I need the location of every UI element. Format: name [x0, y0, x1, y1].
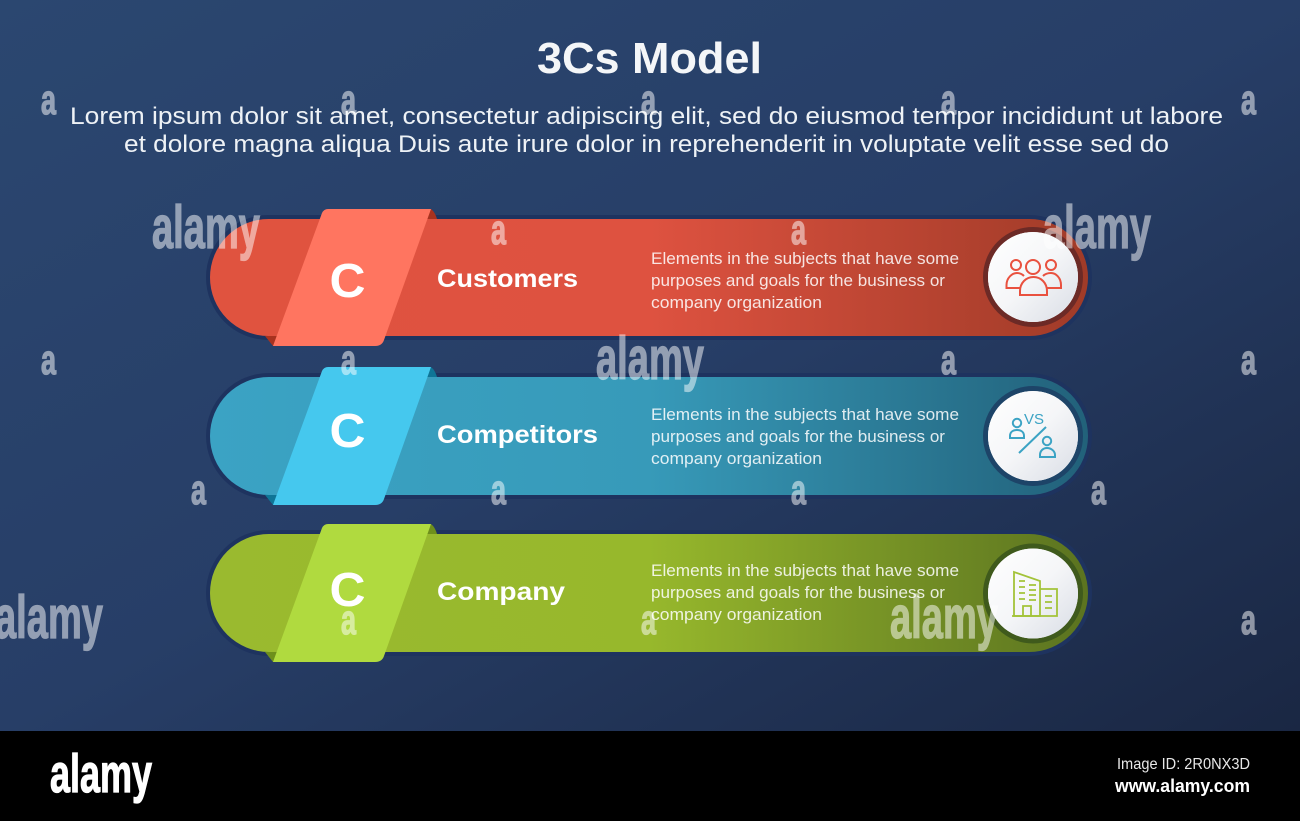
watermarks: alamy — [890, 584, 998, 651]
description — [651, 249, 959, 312]
fold shadows — [265, 524, 437, 662]
watermarks — [0, 76, 1256, 651]
panel: competitors — [206, 367, 1092, 505]
description: purposes and goals for the business or — [651, 427, 945, 446]
label: Competitors — [437, 421, 598, 449]
footer bar — [0, 731, 1300, 821]
website: www.alamy.com — [1114, 776, 1250, 796]
watermarks: a — [1241, 336, 1256, 383]
watermarks: a — [1241, 76, 1256, 123]
intro text — [70, 103, 1223, 158]
label: Company — [437, 578, 565, 606]
watermarks: a — [941, 76, 956, 123]
watermarks: a — [491, 466, 506, 513]
fold shadows — [265, 367, 437, 505]
watermarks: alamy — [596, 325, 704, 392]
icon: person versus person: VS — [1024, 411, 1044, 428]
watermarks: a — [491, 206, 506, 253]
watermarks: alamy — [152, 194, 260, 261]
tab: competitors — [273, 367, 431, 505]
watermarks: a — [1091, 466, 1106, 513]
icon: office building — [986, 546, 1080, 641]
description: purposes and goals for the business or — [651, 583, 945, 602]
watermarks: alamy — [1043, 194, 1151, 261]
tab: customers — [273, 209, 431, 346]
description: Elements in the subjects that have some — [651, 561, 959, 580]
description — [651, 405, 959, 468]
intro text: Lorem ipsum dolor sit amet, consectetur adipiscing elit, sed do eiusmod tempor incididunt ut labore — [70, 103, 1223, 130]
watermarks: a — [341, 336, 356, 383]
description: Elements in the subjects that have some — [651, 249, 959, 268]
icon: person versus person — [986, 388, 1080, 484]
watermarks: a — [941, 336, 956, 383]
watermarks: a — [341, 76, 356, 123]
watermarks: alamy — [0, 584, 103, 651]
description: purposes and goals for the business or — [651, 271, 945, 290]
description — [651, 561, 959, 624]
watermarks: a — [791, 466, 806, 513]
panel: company — [206, 524, 1092, 662]
letter C: C — [330, 564, 366, 617]
fold shadows — [265, 209, 437, 346]
watermarks: a — [1241, 596, 1256, 643]
description: company organization — [651, 449, 822, 468]
bar: competitors — [206, 373, 1092, 499]
watermarks: a — [641, 596, 656, 643]
title: 3Cs Model — [537, 34, 762, 83]
footer logo: alamy — [50, 744, 152, 804]
watermarks: a — [341, 596, 356, 643]
description: company organization — [651, 605, 822, 624]
description: Elements in the subjects that have some — [651, 405, 959, 424]
bar: company — [206, 530, 1092, 656]
watermarks: a — [41, 336, 56, 383]
watermarks: a — [191, 466, 206, 513]
bar: customers — [206, 215, 1092, 340]
label: Customers — [437, 265, 578, 293]
watermarks: a — [641, 76, 656, 123]
watermarks: a — [41, 76, 56, 123]
tab: company — [273, 524, 431, 662]
intro text: et dolore magna aliqua Duis aute irure dolor in reprehenderit in voluptate velit esse sed do — [124, 131, 1169, 158]
letter C: C — [330, 255, 366, 308]
panel: customers — [206, 209, 1092, 346]
image id: Image ID: 2R0NX3D — [1117, 756, 1250, 773]
icon: people group — [986, 230, 1080, 324]
description: company organization — [651, 293, 822, 312]
letter C: C — [330, 405, 366, 458]
watermarks: a — [791, 206, 806, 253]
